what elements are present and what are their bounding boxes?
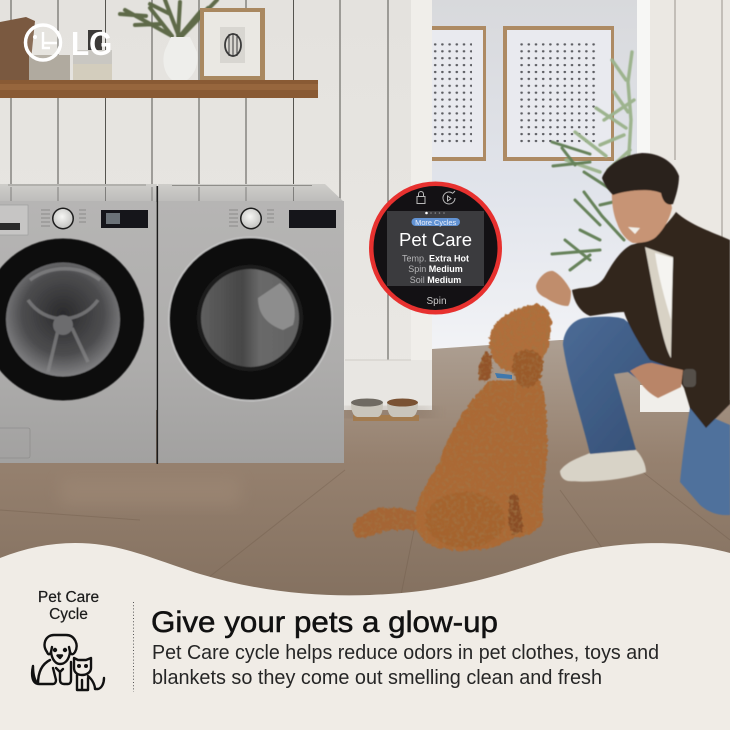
dryer door (168, 236, 333, 402)
right ear (513, 350, 543, 388)
LG logo (26, 25, 112, 62)
display title: Pet Care (399, 229, 472, 250)
hair (602, 153, 679, 205)
vase with foliage (120, 0, 217, 80)
body text: Pet Care cycle helps reduce odors in pet clothes, toys and (152, 642, 659, 664)
dog (32, 635, 77, 684)
body text: blankets so they come out smelling clean and fresh (152, 667, 602, 689)
LG logo: LG (71, 26, 112, 62)
back hallway wall (432, 0, 650, 350)
door trim and right wall panels (637, 0, 730, 412)
storage jars (29, 30, 112, 80)
dryer (158, 184, 344, 463)
feature label: Pet Care (38, 589, 99, 606)
callout: washer display zoom (369, 182, 502, 314)
framed scribble print (200, 8, 265, 80)
headline: Give your pets a glow-up (151, 606, 498, 639)
man (536, 153, 730, 515)
dryer display (289, 210, 336, 228)
framed dot print, left (432, 26, 486, 161)
washing machine (0, 184, 157, 463)
dotted divider (132, 602, 134, 692)
floor (0, 340, 730, 605)
front leg shadow (508, 495, 524, 535)
neck and face (612, 186, 672, 243)
lower hand (630, 363, 683, 398)
pet food bowls (351, 398, 419, 421)
washer door (0, 238, 144, 400)
potted plant behind man (552, 52, 634, 270)
display settings (402, 254, 469, 285)
cat (74, 658, 104, 690)
display settings: Soil Medium (410, 275, 461, 285)
washer display (101, 210, 148, 228)
shoe (560, 450, 646, 482)
far leg (680, 408, 730, 515)
body text (152, 642, 659, 689)
dog collar (495, 373, 512, 379)
washer access panel (0, 428, 30, 458)
dryer cycle labels (229, 210, 274, 226)
feature label: Cycle (49, 606, 88, 623)
cream wave caption panel (0, 543, 730, 730)
page dots (425, 212, 445, 214)
badge: More Cycles: More Cycles (415, 218, 457, 227)
feature label (38, 589, 99, 623)
near leg (563, 317, 680, 454)
shirt (645, 247, 673, 358)
tail (353, 507, 425, 538)
display panel (387, 211, 484, 286)
rear leg (425, 492, 505, 548)
display cycle stage: Spin (426, 296, 447, 307)
display settings: Spin Medium (408, 264, 463, 274)
torso and jacket (572, 212, 730, 428)
panelled laundry room wall (0, 0, 432, 470)
woven basket (0, 17, 35, 80)
wooden shelf (0, 80, 318, 98)
body (415, 380, 547, 550)
framed dot print, right (503, 26, 614, 161)
washer dial (52, 208, 74, 230)
raised hand (536, 271, 571, 306)
icon: lock (417, 192, 425, 204)
display settings: Temp. Extra Hot (402, 254, 469, 264)
icon: dog and cat (32, 635, 104, 690)
washer cycle labels (41, 210, 86, 226)
dryer dial (240, 208, 262, 230)
poodle dog (353, 304, 551, 550)
icon: play circle (443, 191, 455, 204)
left ear (479, 352, 492, 382)
watch (683, 369, 696, 387)
head (489, 304, 551, 372)
detergent drawer (0, 205, 28, 235)
machine gap (156, 186, 158, 464)
